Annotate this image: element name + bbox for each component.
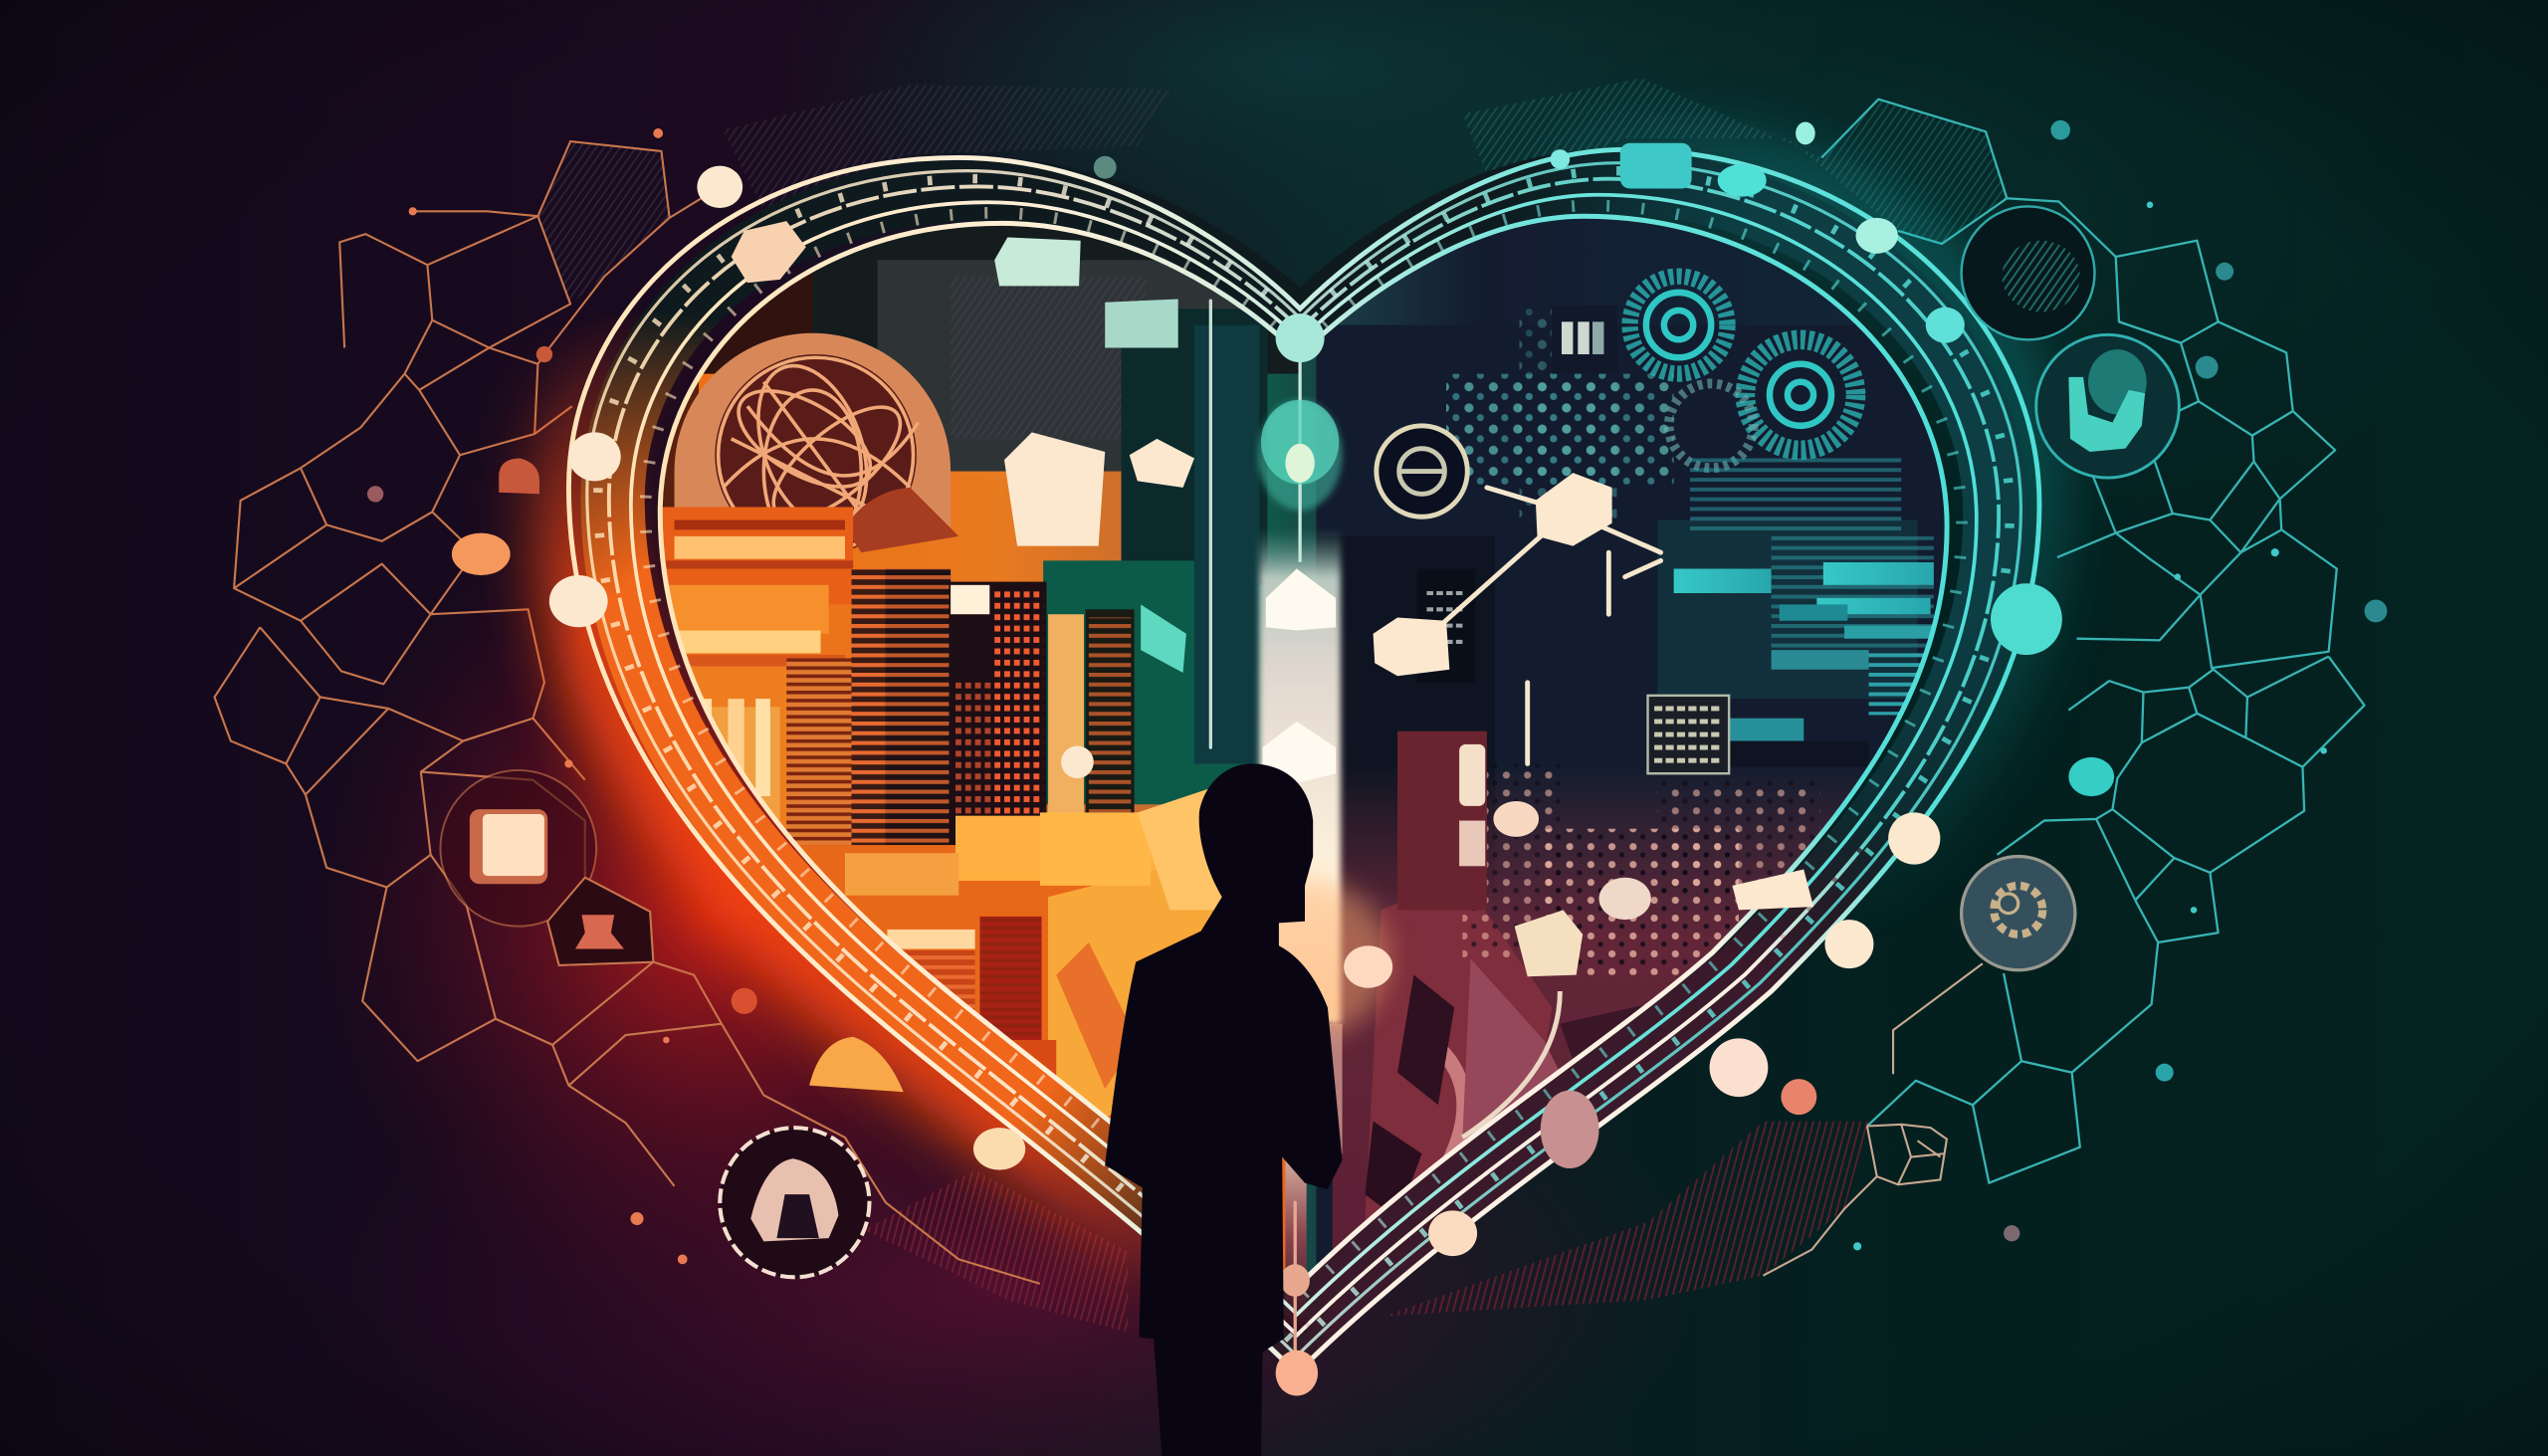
arch machine (675, 333, 958, 555)
right dark base (1316, 325, 2047, 1365)
lower orange field (650, 780, 1300, 1333)
person silhouette (1105, 763, 1343, 1456)
small server board (1648, 696, 1729, 773)
right hexagon network (1821, 100, 2365, 1183)
heart outer glow (568, 149, 2039, 1373)
interior base colour (686, 219, 1855, 1273)
teal bars (1657, 455, 1934, 767)
lower right white rings (568, 149, 2039, 1373)
icon: right top hatched circle (1962, 206, 2094, 339)
orange left blocks (663, 507, 854, 846)
center glowing column (1210, 400, 1389, 1333)
icon: left small robot (547, 878, 653, 965)
pink letters tower (1397, 731, 1487, 910)
tall dark chip (1417, 569, 1475, 683)
hatched halos behind heart (537, 78, 2007, 1333)
dark and red towers (852, 569, 1186, 861)
heart band (613, 181, 1995, 1332)
icon: bottom-left dashed badge (720, 1128, 869, 1277)
icon: left rounded square (440, 770, 596, 927)
connector lines (1210, 301, 1661, 1373)
icon: right U badge (2036, 334, 2179, 478)
teal gears (1630, 277, 1855, 468)
badge: chip medallion inside heart (1377, 426, 1467, 517)
lower right mauve (1333, 763, 1869, 1349)
teal dot field (1446, 374, 1674, 488)
left hexagon network (215, 141, 1040, 1284)
interior dark top (703, 273, 812, 374)
nodes: glowing circles and cubes (367, 120, 2387, 1396)
heart concentric rings (568, 149, 2039, 1373)
icon: right bottom gear coin (1962, 856, 2075, 970)
heart interior mosaic (663, 219, 1945, 1273)
chip glyph (1552, 306, 1616, 374)
lower right warm links (1763, 963, 1983, 1276)
green column (1043, 560, 1254, 804)
scattered specks (409, 128, 2327, 1264)
central teal glow node (1261, 400, 1339, 485)
